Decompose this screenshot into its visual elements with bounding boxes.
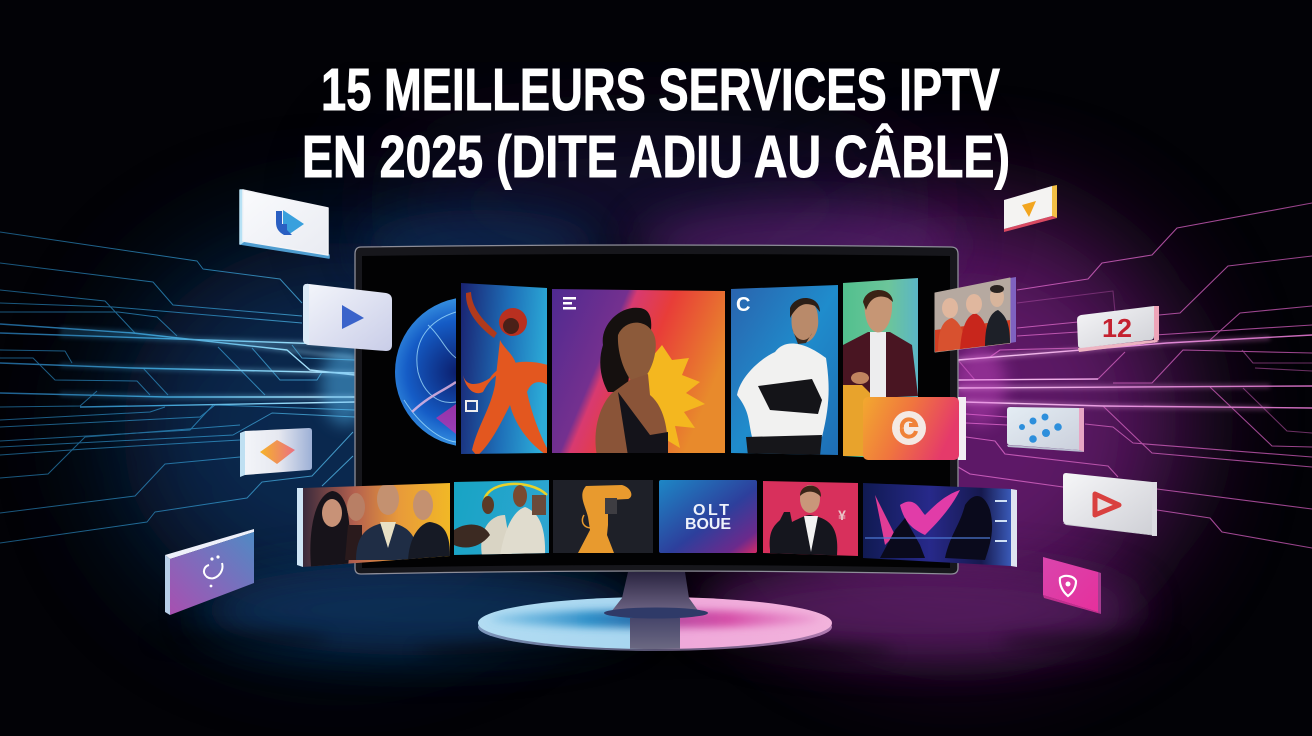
app tile: blue logo: [240, 190, 329, 258]
title: EN 2025 (DITE ADIU AU CÂBLE): [302, 123, 1010, 190]
app tile: purple logo: [165, 529, 254, 615]
floating photo tile: [935, 277, 1016, 352]
screen card: dancer: [461, 280, 551, 458]
icon: orange triangle: [1022, 201, 1036, 217]
screen card: woman and sun: [552, 289, 726, 456]
monitor: [297, 245, 1017, 574]
icon: blue U and play: [276, 210, 304, 235]
screen card: man in burgundy jacket: [843, 276, 919, 462]
app tile: blue play: [303, 284, 392, 351]
screen: globe: [395, 298, 456, 446]
icon: play triangle: [342, 305, 364, 329]
base disc: [478, 597, 832, 652]
icon: red play outline: [1095, 494, 1119, 515]
app tile: number 12: [1077, 306, 1159, 352]
icon: diamond: [260, 440, 295, 464]
app tile: yellow triangle: [1004, 185, 1057, 232]
screen row: dancers on blue: [863, 483, 1017, 567]
blue data lines: left: [0, 232, 369, 543]
magenta data lines: right: [954, 203, 1312, 548]
screen row: group portrait: [297, 483, 450, 567]
title: 15 MEILLEURS SERVICES IPTV: [321, 57, 1000, 123]
title: [302, 57, 1010, 190]
screen row: two men on teal: [454, 480, 549, 556]
screen row: man in tuxedo: ¥: [838, 507, 846, 523]
app tile: orange diamond: [240, 428, 312, 477]
neck: [611, 572, 699, 612]
icon: white squiggle: [204, 555, 223, 587]
screen: [362, 254, 950, 568]
icon: white shield: [1060, 576, 1076, 596]
screen card: man in white shirt: C: [736, 294, 750, 316]
label: 12: 12: [1102, 313, 1132, 343]
screen row: blue title card: [659, 480, 757, 553]
screen row: blue title card: OLT: [693, 502, 729, 519]
monitor stand: [478, 572, 832, 652]
screen row: man in tuxedo: [763, 480, 859, 557]
screen row: blue title card: BOUE: [685, 516, 731, 533]
icon: round logo: [892, 411, 926, 445]
screen card: orange app tile: [863, 397, 966, 460]
screen card: man in white shirt: [731, 285, 839, 457]
app tile: pink logo: [1043, 557, 1101, 614]
app tile: blue dots: [1007, 407, 1084, 452]
icon: dots: [1019, 414, 1062, 443]
app tile: red play: [1063, 473, 1157, 536]
screen row: orange figure on dark card: [553, 480, 653, 553]
